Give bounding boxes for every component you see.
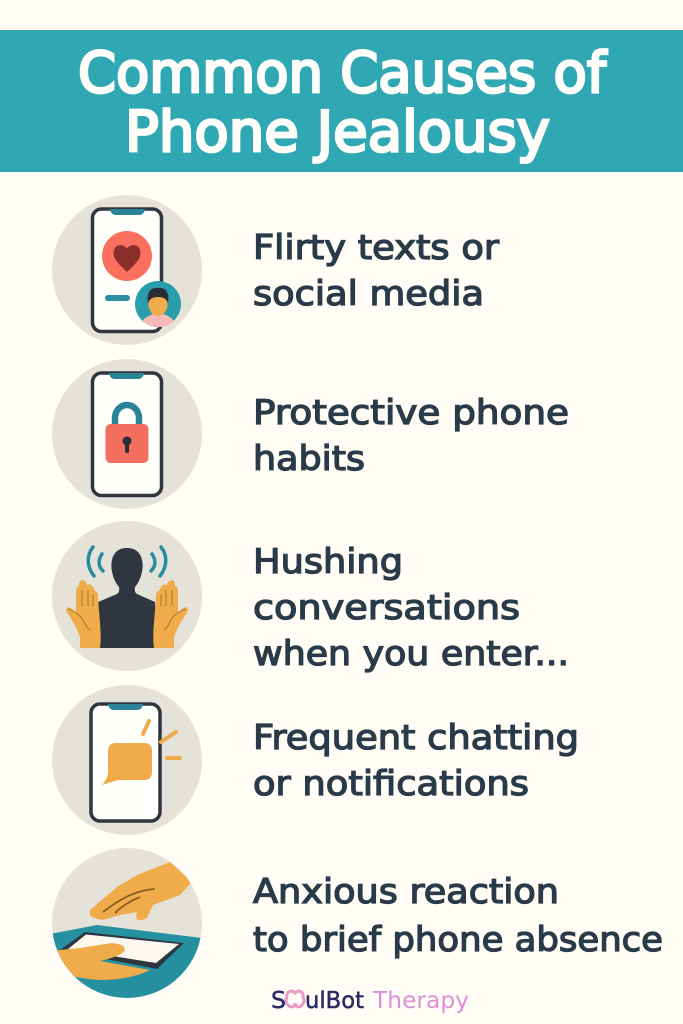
text: frequent chatting: Frequent chatting [253,718,579,758]
title banner [0,30,683,172]
icon: phone with padlock [52,359,202,509]
logo: SoulBot Therapy [271,988,469,1014]
text: hushing conversations: Hushing [253,542,403,582]
icon: brain logo [286,991,304,1007]
text: protective habits: Protective phone [253,393,569,433]
title banner: Phone Jealousy [125,100,550,165]
icon: silhouette with raised hands [52,521,202,671]
text: flirty texts: Flirty texts or [253,228,499,268]
text: protective habits [253,393,569,479]
text: anxious reaction: to brief phone absence [253,920,663,960]
text: hushing conversations: when you enter... [253,634,569,674]
logo: SoulBot Therapy: ulBot [305,988,364,1014]
text: anxious reaction: Anxious reaction [253,872,559,912]
text: hushing conversations [253,542,569,674]
text: protective habits: habits [253,439,365,479]
text: frequent chatting [253,718,579,804]
text: flirty texts: social media [253,274,484,314]
icon: hands over phone [52,848,202,998]
icon: phone with chat bubble [52,685,202,835]
logo: SoulBot Therapy: S [271,988,286,1014]
text: flirty texts [253,228,499,314]
text: hushing conversations: conversations [253,588,520,628]
icon: phone with heart and avatar [52,195,202,345]
logo: SoulBot Therapy: Therapy [372,988,469,1014]
text: frequent chatting: or notifications [253,764,529,804]
text: anxious reaction [253,872,663,960]
title banner: Common Causes of [78,41,607,106]
